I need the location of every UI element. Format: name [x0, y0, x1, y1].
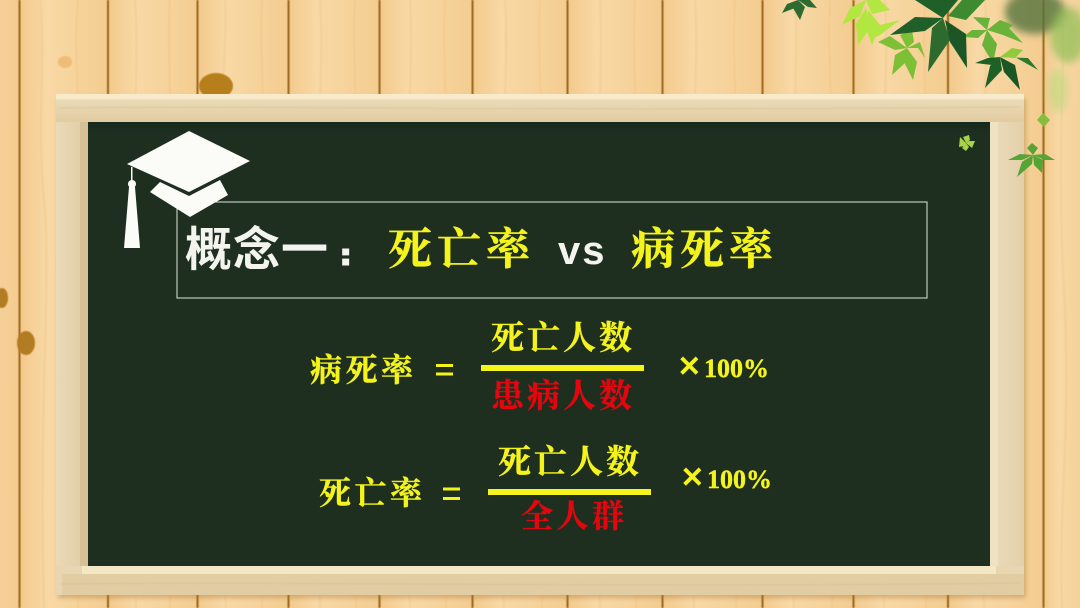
- leaf: small dark top: [782, 0, 817, 20]
- title: :: [341, 239, 350, 270]
- title: 概念一: [185, 223, 329, 276]
- formula label: 病死率: [310, 352, 417, 388]
- leaf: upper bright green: [963, 17, 1023, 63]
- numerator: 死亡人数: [491, 320, 635, 357]
- wood knots: [0, 56, 233, 355]
- wooden frame shadow: [58, 98, 1026, 598]
- green chalkboard: [88, 122, 990, 566]
- wooden frame: [56, 94, 1024, 595]
- multiplier: ×: [678, 343, 701, 388]
- small leaf on wall: [1037, 113, 1050, 127]
- equals sign: [436, 364, 453, 376]
- denominator: 全人群: [521, 498, 628, 534]
- formula label: 死亡率: [319, 475, 426, 511]
- formula: mortality rate: [319, 444, 772, 534]
- title: 病死率: [631, 225, 778, 274]
- leaf: large dark: [890, 0, 985, 72]
- numerator: 死亡人数: [498, 444, 642, 481]
- formula: case fatality rate: [310, 320, 769, 415]
- title frame: [177, 202, 927, 298]
- leaf: light green left: [842, 0, 900, 45]
- leaf: mid green below: [878, 30, 925, 80]
- leaf: dark right: [975, 48, 1038, 90]
- title: [185, 223, 778, 276]
- fraction bar: [488, 489, 651, 495]
- multiplier: ×: [681, 454, 704, 499]
- multiplier: 100%: [704, 354, 769, 383]
- small leaf on board: [959, 135, 975, 151]
- title: vs: [558, 229, 606, 273]
- fraction bar: [481, 365, 644, 371]
- multiplier: 100%: [707, 465, 772, 494]
- denominator: 患病人数: [491, 378, 635, 415]
- foliage: top right leaves: [782, 0, 1080, 177]
- icon: graduation cap: [124, 131, 250, 248]
- equals sign: [443, 488, 460, 500]
- title: 死亡率: [388, 225, 535, 274]
- leaf on right frame: [1008, 143, 1055, 177]
